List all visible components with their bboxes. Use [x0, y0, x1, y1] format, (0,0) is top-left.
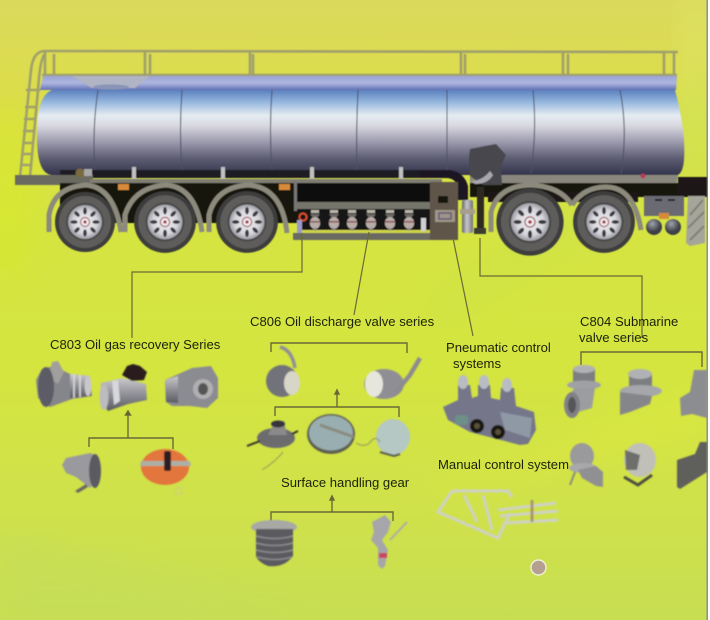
roof handrail and ladder — [20, 51, 678, 177]
submarine valve 6 — [677, 442, 707, 489]
submarine valve 2 — [620, 369, 662, 415]
fenders — [49, 185, 641, 233]
submarine valve 4 — [569, 443, 603, 487]
heading: C806: C806 Oil discharge valve series — [250, 314, 435, 329]
heading: manual control: Manual control system — [438, 457, 569, 472]
discharge valves — [310, 210, 320, 230]
wheels — [55, 192, 115, 252]
marker dot — [531, 560, 546, 575]
surface handling gear — [251, 515, 407, 569]
heading: valve series: valve series — [579, 330, 649, 345]
heading: systems: systems — [453, 356, 501, 371]
C803 valve middle — [100, 364, 147, 411]
C804 connector — [581, 352, 702, 367]
valve with handle left — [266, 347, 300, 397]
C803 connector — [89, 411, 173, 449]
gun nozzle — [371, 515, 407, 569]
pneumatic canister — [462, 200, 473, 233]
C803 orange cap — [140, 449, 191, 494]
C803 adapter — [62, 453, 101, 493]
submarine valve 5 — [624, 443, 656, 485]
submarine valve 3 — [680, 370, 707, 418]
valve with handle right — [364, 358, 420, 399]
submarine valve 1 — [564, 365, 601, 418]
reflectors and lugs — [118, 184, 129, 190]
C806 connectors — [271, 343, 407, 521]
rear lights and mudguard — [644, 196, 684, 216]
C806 valves — [247, 347, 420, 470]
C803 valve left — [36, 361, 92, 407]
tank body — [37, 90, 684, 175]
oil gas recovery fitting — [299, 213, 307, 221]
chained cap — [356, 419, 410, 456]
title: C803: C803 Oil gas recovery Series — [50, 337, 221, 352]
C804 valves — [564, 365, 707, 489]
manual control system — [438, 491, 558, 538]
heading: pneumatic control: Pneumatic control — [446, 340, 551, 355]
round cover — [307, 414, 355, 454]
C803 valve right — [165, 366, 218, 408]
tank top band — [40, 76, 677, 90]
chassis — [60, 170, 430, 178]
C803 valves — [36, 361, 218, 494]
leader lines — [132, 232, 642, 338]
bellows — [251, 520, 297, 566]
heading: surface handling gear: Surface handling gear — [281, 475, 410, 490]
tank seams — [94, 90, 624, 174]
heading: C804: C804 Submarine — [580, 314, 678, 329]
tanker truck — [15, 51, 707, 256]
submarine valve housing — [469, 144, 506, 185]
pneumatic control unit — [443, 375, 536, 445]
control cabinet — [430, 182, 458, 240]
hose coupling — [247, 420, 298, 470]
